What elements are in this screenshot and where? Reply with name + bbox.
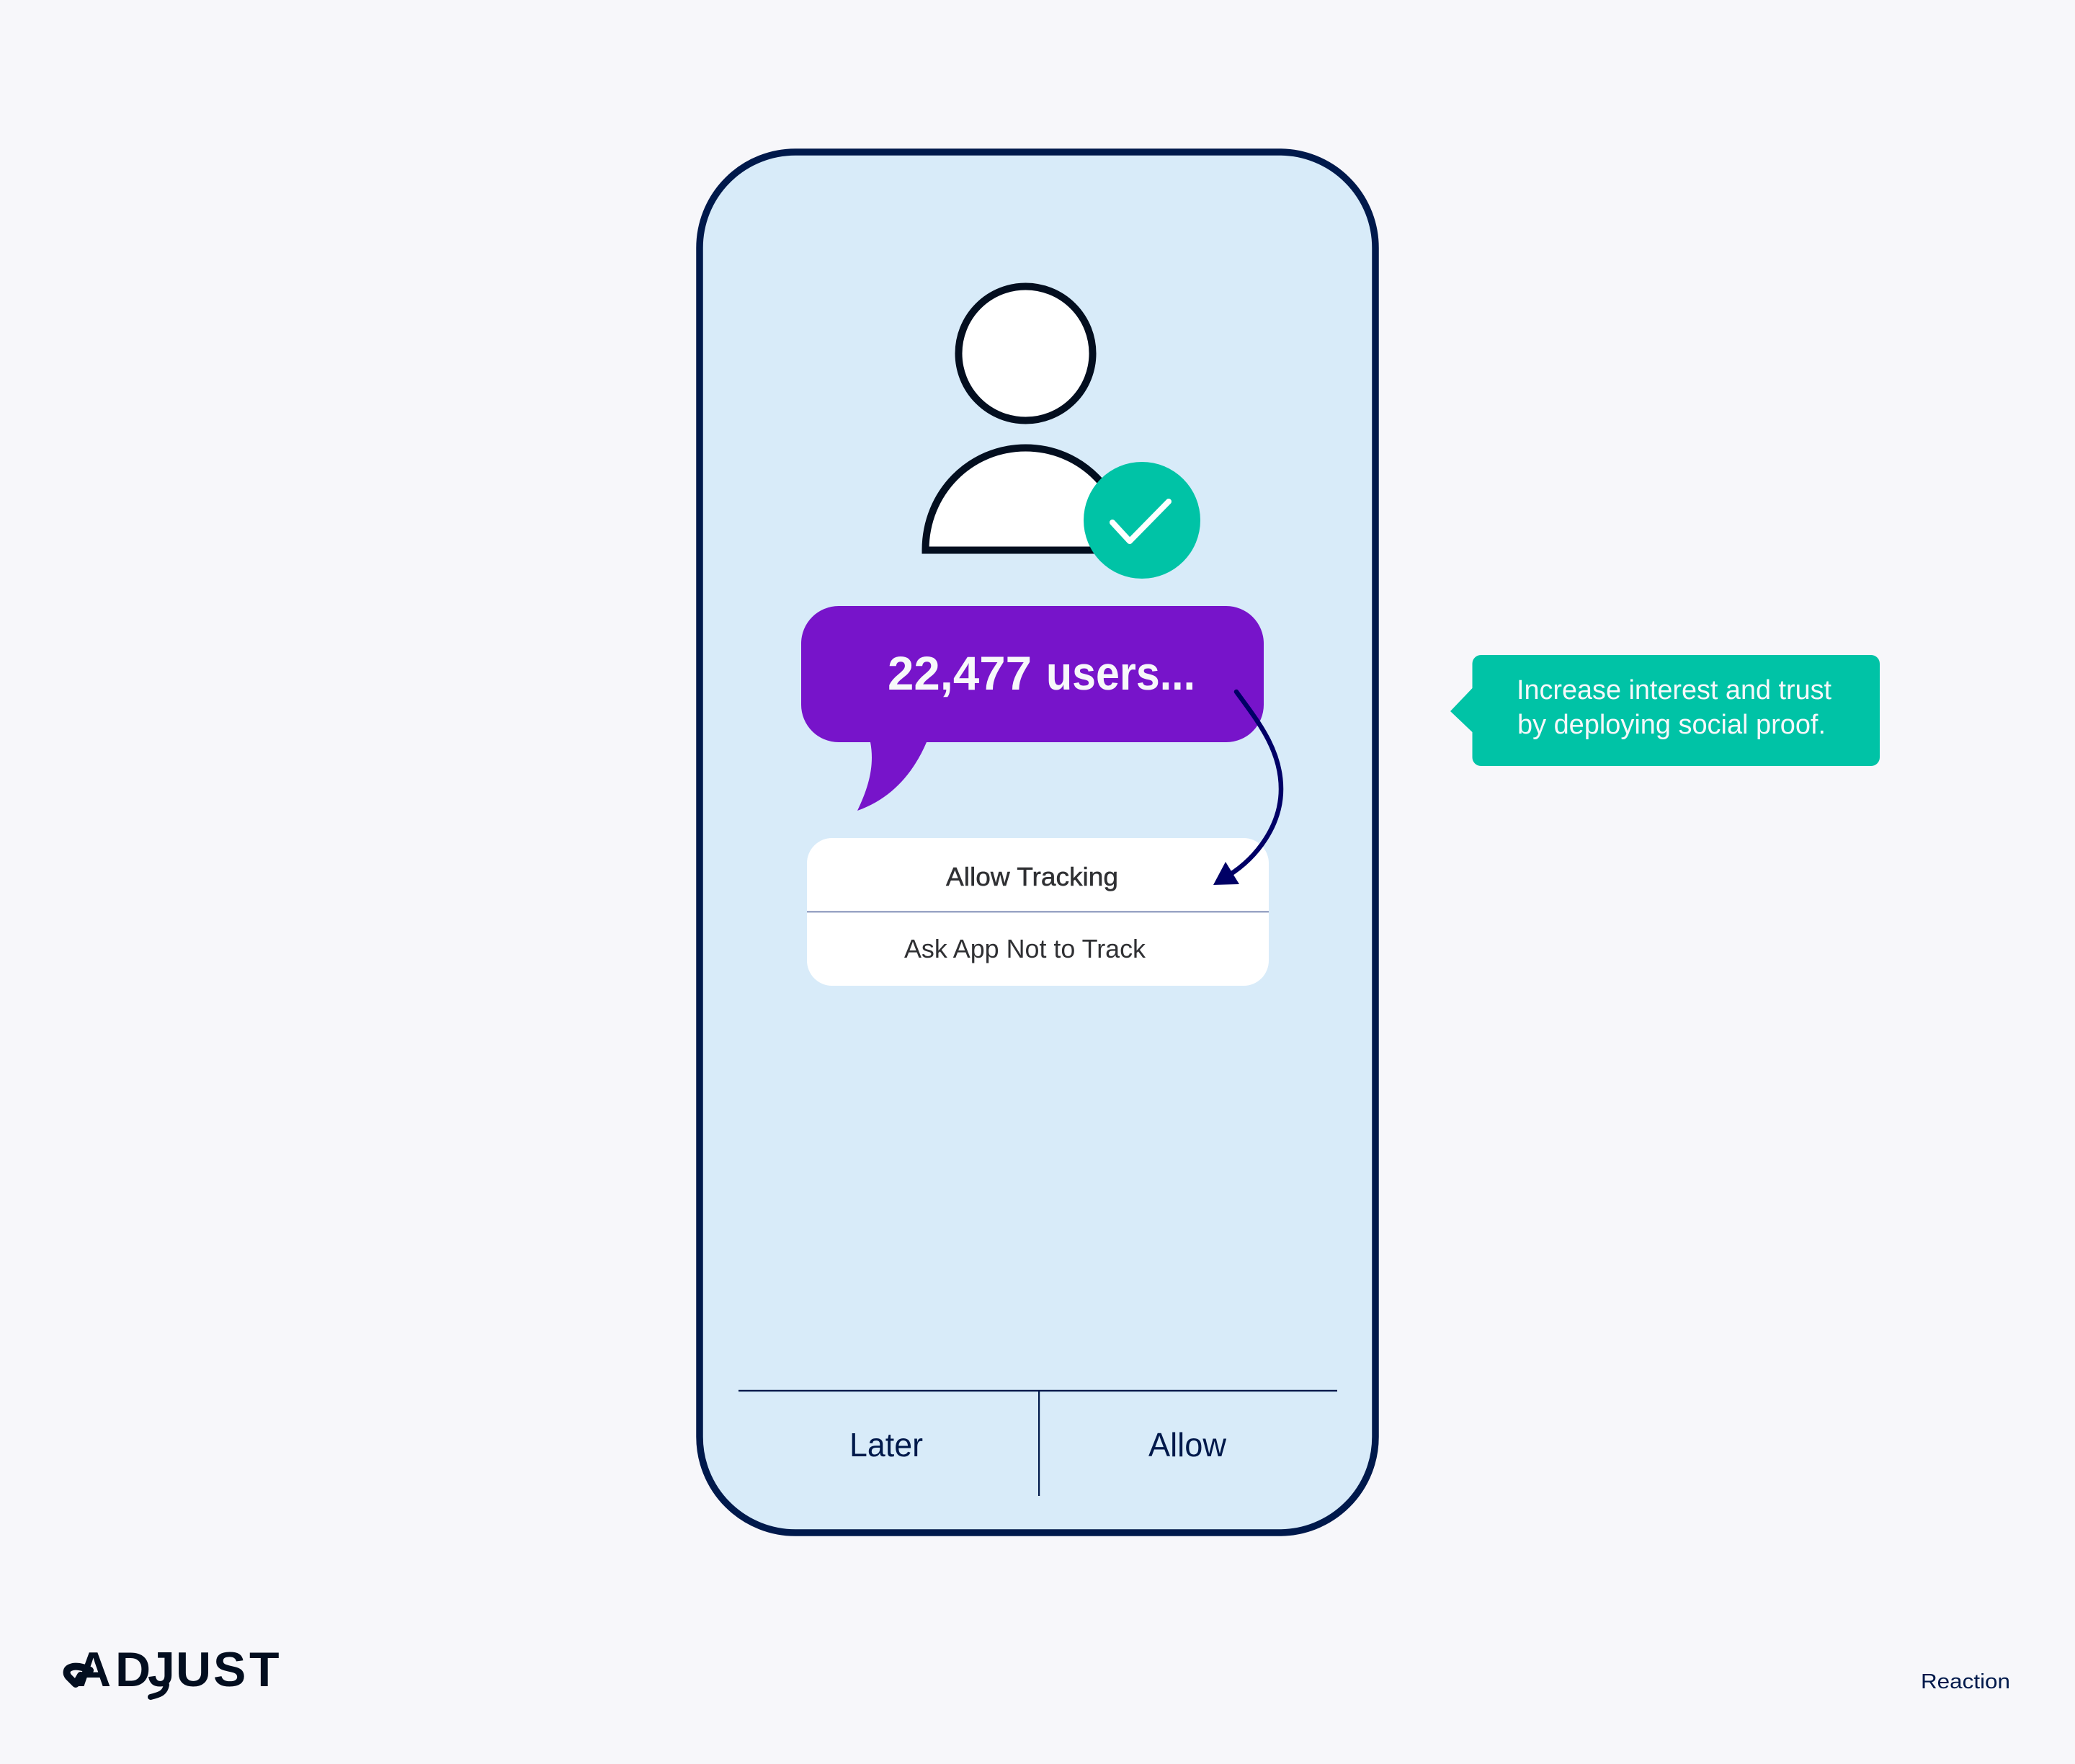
button bar: Later / Allow: [738, 1390, 1337, 1496]
speech bubble: user count: users...: [1046, 646, 1195, 700]
button bar: Later / Allow: Later: [849, 1426, 923, 1464]
callout: social proof tip: [1450, 655, 1880, 766]
panel: tracking options card: Allow Tracking: [946, 862, 1118, 891]
logo: Adjust: ADJUST: [76, 1642, 280, 1697]
callout: social proof tip: Increase interest and trust: [1517, 675, 1831, 705]
button bar: Later / Allow: Allow: [1148, 1426, 1227, 1464]
panel: phone: [700, 152, 1375, 1533]
speech bubble: user count: 22,477: [888, 646, 1032, 700]
callout: social proof tip: by deploying social proof.: [1517, 710, 1826, 740]
label: Reaction: Reaction: [1921, 1670, 2010, 1693]
panel: tracking options card: [807, 838, 1269, 986]
speech bubble: user count: [801, 606, 1264, 811]
arrow: bubble to Allow Tracking: [1213, 692, 1281, 885]
icon: verified user: [925, 287, 1200, 579]
panel: tracking options card: Ask App Not to Track: [904, 934, 1146, 963]
